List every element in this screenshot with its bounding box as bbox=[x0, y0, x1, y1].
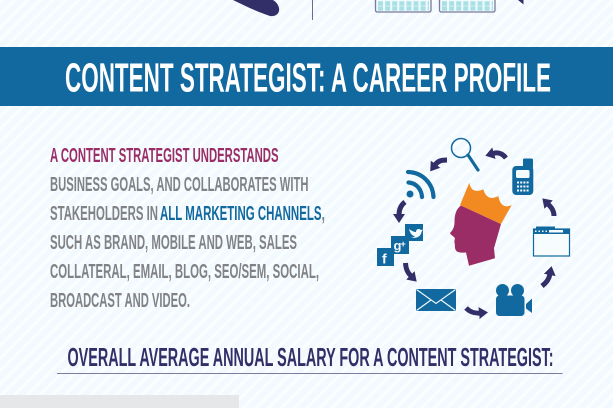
intro text block: BROADCAST AND VIDEO. bbox=[50, 289, 190, 312]
intro text block bbox=[50, 144, 325, 312]
icon: social media squares: g bbox=[394, 238, 402, 253]
icon: envelope bbox=[416, 289, 456, 311]
grey salary panel bbox=[0, 395, 239, 408]
intro text block: , bbox=[322, 202, 325, 225]
intro text block: A CONTENT STRATEGIST UNDERSTANDS bbox=[50, 144, 278, 167]
previous section: vertical divider bbox=[312, 0, 313, 20]
arrows between channel icons bbox=[399, 153, 554, 313]
channel cycle diagram bbox=[377, 138, 570, 316]
intro text block: BUSINESS GOALS, AND COLLABORATES WITH bbox=[50, 173, 308, 196]
icon: magnifying glass bbox=[452, 138, 478, 170]
icon: video camera bbox=[496, 284, 532, 316]
previous section: calendar grid icons bbox=[376, 0, 495, 12]
icon: mobile phone bbox=[512, 158, 533, 195]
icon: social media squares: f bbox=[382, 250, 387, 266]
icon: head with crown bbox=[450, 183, 512, 266]
icon: browser window bbox=[533, 226, 570, 256]
intro text block: STAKEHOLDERS IN bbox=[50, 202, 158, 225]
intro text block: ALL MARKETING CHANNELS bbox=[160, 202, 322, 225]
previous section: arrow tip fragment bbox=[518, 0, 524, 4]
title banner bbox=[0, 47, 613, 106]
intro text block: COLLATERAL, EMAIL, BLOG, SEO/SEM, SOCIAL, bbox=[50, 260, 319, 283]
icon: social media squares: + bbox=[400, 239, 406, 249]
previous section: navy shape fragment bbox=[233, 0, 279, 16]
icon: social media squares bbox=[377, 224, 423, 266]
intro text block: SUCH AS BRAND, MOBILE AND WEB, SALES bbox=[50, 231, 297, 254]
icon: RSS feed bbox=[406, 172, 434, 198]
